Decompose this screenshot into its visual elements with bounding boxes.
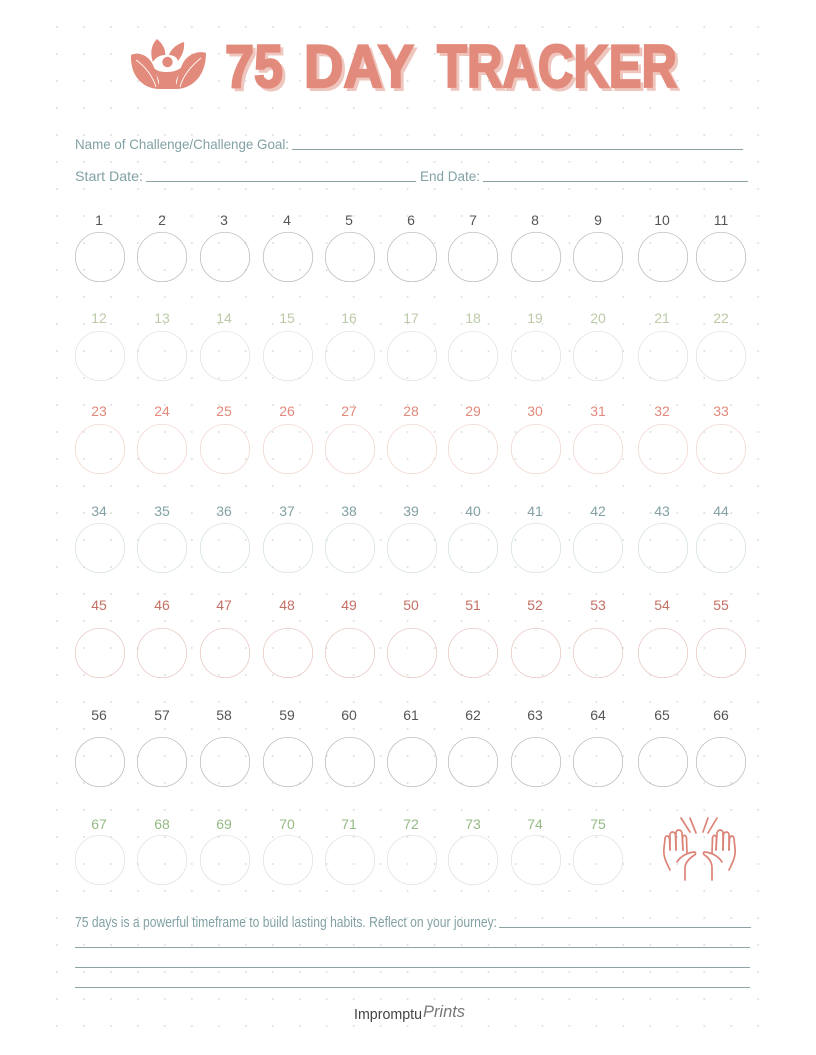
row 4: days 34-44: 41: [527, 503, 543, 519]
logo: lotus with figure: [131, 39, 206, 89]
row 2: days 12-22: 19: [527, 310, 543, 326]
row 6: days 56-66: 57: [154, 707, 170, 723]
row 1: days 1-11: [75, 212, 746, 282]
row 2: days 12-22: 14: [216, 310, 232, 326]
footer brand: [354, 1002, 465, 1023]
row 3: days 23-33: 33: [713, 403, 729, 419]
title: 75: [228, 36, 286, 103]
row 4: days 34-44: [75, 503, 746, 573]
row 2: days 12-22: 22: [713, 310, 729, 326]
row 7: days 67-75: 74: [527, 816, 543, 832]
icon: raised hands: [664, 818, 735, 880]
row 5: days 45-55: 45: [91, 597, 107, 613]
row 6: days 56-66: 61: [403, 707, 419, 723]
row 5: days 45-55: 52: [527, 597, 543, 613]
row 3: days 23-33: 23: [91, 403, 107, 419]
title: 75: [225, 33, 283, 100]
row 3: days 23-33: 26: [279, 403, 295, 419]
row 3: days 23-33: 32: [654, 403, 670, 419]
row 6: days 56-66: [75, 707, 746, 787]
row 2: days 12-22: 17: [403, 310, 419, 326]
row 5: days 45-55: 54: [654, 597, 670, 613]
row 4: days 34-44: 42: [590, 503, 606, 519]
row 5: days 45-55: 46: [154, 597, 170, 613]
row 4: days 34-44: 39: [403, 503, 419, 519]
footer brand: Impromptu: [354, 1007, 422, 1023]
row 5: days 45-55: 49: [341, 597, 357, 613]
row 3: days 23-33: 29: [465, 403, 481, 419]
row 6: days 56-66: 56: [91, 707, 107, 723]
row 5: days 45-55: 48: [279, 597, 295, 613]
row 4: days 34-44: 35: [154, 503, 170, 519]
title: DAY: [307, 36, 417, 103]
row 6: days 56-66: 64: [590, 707, 606, 723]
row 1: days 1-11: 5: [345, 212, 353, 228]
row 2: days 12-22: 15: [279, 310, 295, 326]
row 2: days 12-22: 18: [465, 310, 481, 326]
row 6: days 56-66: 58: [216, 707, 232, 723]
row 7: days 67-75: 69: [216, 816, 232, 832]
row 1: days 1-11: 3: [220, 212, 228, 228]
form field: start and end date: End Date:: [420, 168, 480, 184]
row 1: days 1-11: 8: [531, 212, 539, 228]
row 7: days 67-75: 70: [279, 816, 295, 832]
row 2: days 12-22: 21: [654, 310, 670, 326]
row 4: days 34-44: 40: [465, 503, 481, 519]
row 4: days 34-44: 38: [341, 503, 357, 519]
row 1: days 1-11: 7: [469, 212, 477, 228]
row 6: days 56-66: 60: [341, 707, 357, 723]
row 2: days 12-22: [75, 310, 746, 381]
row 6: days 56-66: 63: [527, 707, 543, 723]
title: [225, 33, 680, 103]
row 6: days 56-66: 66: [713, 707, 729, 723]
title: DAY: [304, 33, 414, 100]
row 1: days 1-11: 4: [283, 212, 291, 228]
row 7: days 67-75: 75: [590, 816, 606, 832]
row 3: days 23-33: 30: [527, 403, 543, 419]
row 7: days 67-75: 67: [91, 816, 107, 832]
row 3: days 23-33: 31: [590, 403, 606, 419]
row 2: days 12-22: 20: [590, 310, 606, 326]
title: TRACKER: [437, 33, 677, 100]
form field: challenge goal: Name of Challenge/Challenge Goal:: [75, 136, 289, 152]
row 2: days 12-22: 16: [341, 310, 357, 326]
footer brand: Prints: [423, 1002, 465, 1021]
row 5: days 45-55: 50: [403, 597, 419, 613]
row 7: days 67-75: 72: [403, 816, 419, 832]
row 1: days 1-11: 9: [594, 212, 602, 228]
row 5: days 45-55: 53: [590, 597, 606, 613]
form field: start and end date: [75, 168, 748, 184]
row 3: days 23-33: 25: [216, 403, 232, 419]
row 4: days 34-44: 43: [654, 503, 670, 519]
row 7: days 67-75: 68: [154, 816, 170, 832]
row 3: days 23-33: 27: [341, 403, 357, 419]
row 5: days 45-55: 51: [465, 597, 481, 613]
row 7: days 67-75: [75, 816, 623, 885]
row 6: days 56-66: 62: [465, 707, 481, 723]
row 5: days 45-55: 55: [713, 597, 729, 613]
row 7: days 67-75: 71: [341, 816, 357, 832]
row 3: days 23-33: [75, 403, 746, 474]
row 2: days 12-22: 12: [91, 310, 107, 326]
title: TRACKER: [440, 36, 680, 103]
row 6: days 56-66: 59: [279, 707, 295, 723]
row 7: days 67-75: 73: [465, 816, 481, 832]
row 4: days 34-44: 34: [91, 503, 107, 519]
row 1: days 1-11: 6: [407, 212, 415, 228]
row 3: days 23-33: 28: [403, 403, 419, 419]
row 5: days 45-55: [75, 597, 746, 678]
row 2: days 12-22: 13: [154, 310, 170, 326]
row 4: days 34-44: 44: [713, 503, 729, 519]
row 4: days 34-44: 36: [216, 503, 232, 519]
row 3: days 23-33: 24: [154, 403, 170, 419]
row 5: days 45-55: 47: [216, 597, 232, 613]
row 1: days 1-11: 11: [714, 212, 728, 228]
form field: start and end date: Start Date:: [75, 168, 143, 184]
row 1: days 1-11: 2: [158, 212, 166, 228]
row 6: days 56-66: 65: [654, 707, 670, 723]
reflection prompt with lines: 75 days is a powerful timeframe to build lasting habits. Reflect on your journey:: [75, 914, 497, 931]
row 4: days 34-44: 37: [279, 503, 295, 519]
row 1: days 1-11: 1: [95, 212, 103, 228]
row 1: days 1-11: 10: [654, 212, 670, 228]
